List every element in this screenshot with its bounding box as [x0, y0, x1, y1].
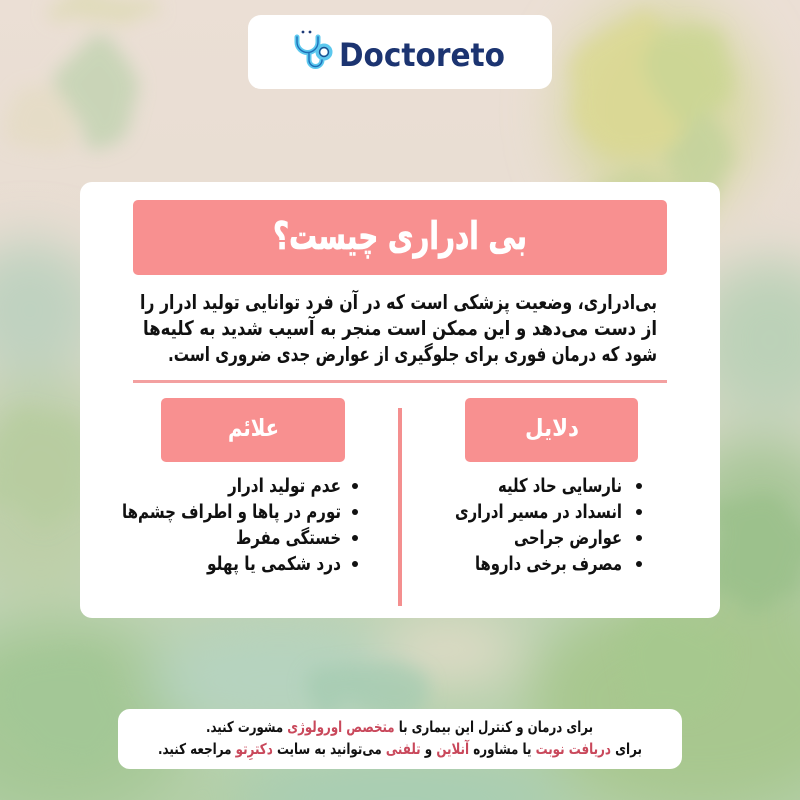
- list: causes: انسداد در مسیر ادراری: [455, 501, 622, 523]
- logo wordmark: Doctoreto: [339, 36, 505, 74]
- heading: symptoms: [161, 398, 345, 462]
- heading: causes: [465, 398, 638, 462]
- list: symptoms: تورم در پاها و اطراف چشم‌ها: [122, 501, 341, 523]
- footer callout: برای درمان و کنترل این بیماری با متخصص اورولوژی مشورت کنید.: [206, 718, 593, 736]
- title banner: بی ادراری چیست؟: [273, 214, 527, 258]
- list: causes: مصرف برخی داروها: [475, 553, 622, 575]
- main card: [80, 182, 720, 618]
- logo panel: [248, 15, 552, 89]
- list: causes: [455, 475, 642, 575]
- list: symptoms: [122, 475, 358, 575]
- heading: symptoms: علائم: [228, 414, 279, 442]
- title banner: [133, 200, 667, 275]
- column divider: [398, 408, 402, 606]
- footer callout: [118, 709, 682, 769]
- footer callout: برای دریافت نوبت یا مشاوره آنلاین و تلفنی می‌توانید به سایت دکترِتو مراجعه کنید.: [158, 740, 642, 761]
- definition paragraph: بی‌ادراری، وضعیت پزشکی است که در آن فرد توانایی تولید ادرار را: [140, 289, 657, 315]
- icon: stethoscope: [297, 31, 330, 67]
- list: symptoms: درد شکمی یا پهلو: [206, 553, 341, 575]
- definition paragraph: [140, 289, 657, 366]
- heading: causes: دلایل: [525, 414, 579, 442]
- list: symptoms: عدم تولید ادرار: [227, 475, 341, 497]
- definition paragraph: شود که درمان فوری برای جلوگیری از عوارض جدی ضروری است.: [168, 342, 657, 366]
- list: causes: عوارض جراحی: [514, 527, 622, 549]
- list: symptoms: خستگی مفرط: [236, 526, 341, 549]
- list: causes: نارسایی حاد کلیه: [498, 475, 622, 497]
- definition paragraph: از دست می‌دهد و این ممکن است منجر به آسیب شدید به کلیه‌ها: [143, 315, 657, 340]
